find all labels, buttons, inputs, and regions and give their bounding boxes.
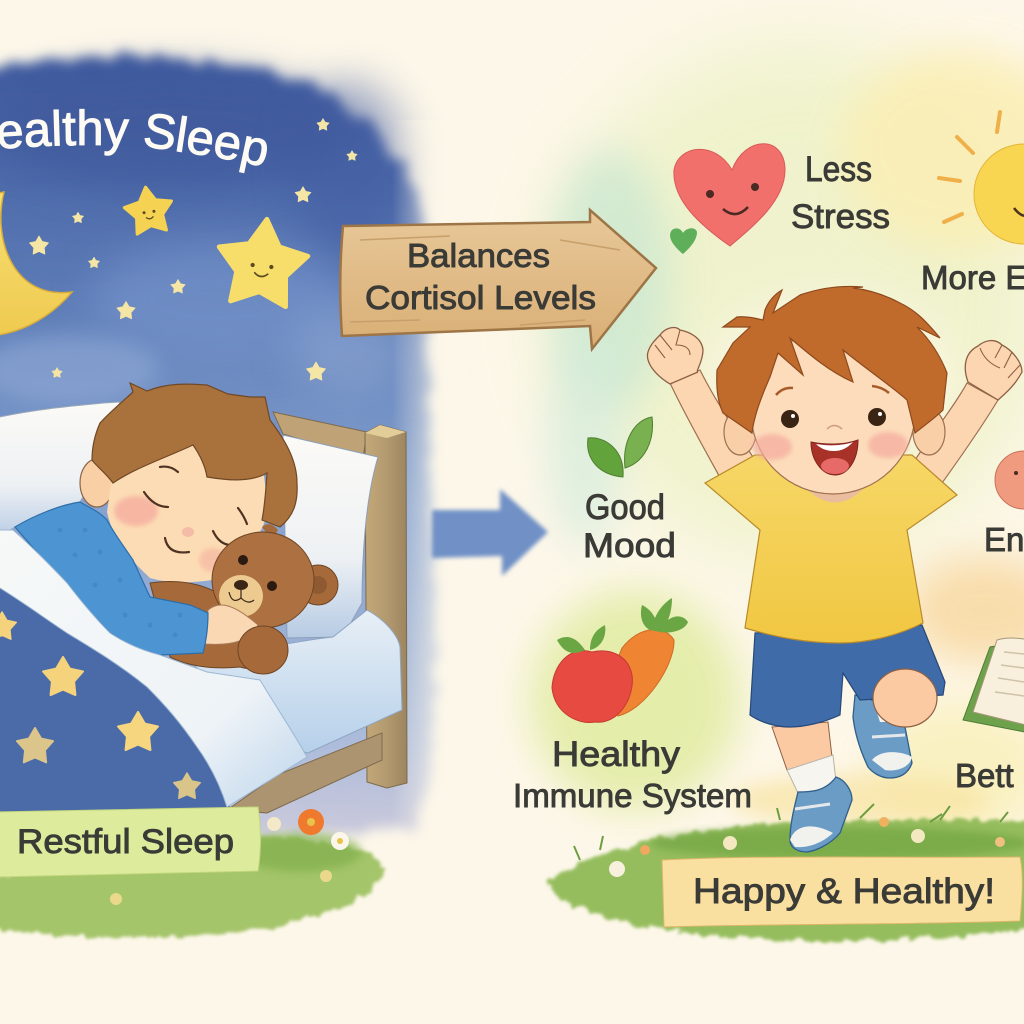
fist right bbox=[965, 341, 1022, 400]
label: healthy immune system: Healthy bbox=[552, 735, 681, 774]
teddy bear bbox=[150, 524, 338, 669]
knee bbox=[873, 669, 937, 727]
icon: sun bbox=[939, 112, 1024, 244]
back shoe bbox=[853, 695, 912, 778]
child sleeping bbox=[80, 383, 297, 582]
banner: happy and healthy: Happy & Healthy! bbox=[693, 872, 995, 911]
label: less stress bbox=[791, 150, 890, 236]
icon: leaves bbox=[588, 417, 653, 477]
child ear bbox=[80, 459, 114, 507]
arrow label: Balances bbox=[407, 237, 550, 274]
head bbox=[751, 330, 915, 494]
hair bbox=[717, 286, 947, 433]
banner: restful sleep bbox=[0, 807, 260, 877]
tiny stars bbox=[30, 118, 357, 380]
icon: large star right bbox=[214, 215, 311, 309]
arrow label: Cortisol Levels bbox=[365, 279, 596, 316]
child eyes and mouth bbox=[144, 467, 247, 552]
child hair bbox=[92, 383, 297, 527]
nose bbox=[827, 426, 842, 429]
pillow right bbox=[283, 435, 378, 638]
right flowers bbox=[609, 817, 1005, 877]
ears bbox=[724, 409, 756, 455]
child blue sleeve bbox=[15, 502, 208, 655]
child hand bbox=[205, 605, 258, 644]
panel: left grass bbox=[0, 832, 384, 938]
neck bbox=[808, 490, 862, 502]
banner: restful sleep: Restful Sleep bbox=[17, 823, 234, 861]
icon: crescent moon bbox=[0, 192, 72, 336]
panel: right grass bbox=[548, 804, 1024, 941]
icon: peach bbox=[995, 451, 1024, 509]
arrow: wooden sign bbox=[340, 210, 656, 349]
label: less stress: Less bbox=[805, 150, 872, 189]
teddy paw bbox=[238, 626, 288, 674]
bed frame bbox=[227, 412, 407, 813]
fist left bbox=[647, 328, 703, 384]
icon: heart bbox=[674, 144, 785, 246]
label: energy: En bbox=[984, 521, 1024, 558]
label: good mood: Good bbox=[585, 488, 665, 527]
label: better: Bett bbox=[955, 757, 1014, 794]
sock bbox=[787, 755, 837, 793]
mouth bbox=[811, 440, 858, 475]
child arms bbox=[670, 370, 760, 483]
icon: apple and carrot bbox=[552, 598, 688, 723]
eyes bbox=[781, 410, 799, 428]
banner: happy and healthy bbox=[662, 857, 1022, 927]
shorts bbox=[750, 625, 945, 727]
mattress bbox=[190, 610, 402, 753]
front shoe bbox=[790, 777, 852, 852]
label: healthy immune system: Immune System bbox=[513, 777, 752, 814]
label: good mood bbox=[583, 488, 676, 565]
blanket bbox=[0, 530, 307, 815]
panel: night sky wash bbox=[0, 57, 452, 850]
label: less stress: Stress bbox=[791, 198, 890, 236]
icon: book bbox=[963, 638, 1024, 733]
pillow left bbox=[0, 402, 120, 540]
left flowers bbox=[110, 809, 349, 905]
cheeks bbox=[752, 434, 792, 460]
shirt bbox=[705, 455, 957, 643]
arrow: blue bbox=[432, 489, 548, 576]
label: good mood: Mood bbox=[583, 527, 676, 565]
sheet fold bbox=[0, 530, 307, 807]
child head bbox=[107, 440, 268, 582]
panel: meadow wash bbox=[530, 40, 1024, 840]
icon: small green heart bbox=[670, 228, 697, 254]
arrow label bbox=[365, 237, 596, 316]
eyebrows bbox=[776, 386, 889, 395]
child cheek bbox=[114, 496, 158, 526]
child jumping bbox=[647, 286, 1022, 852]
front leg bbox=[772, 722, 832, 770]
label: healthy immune system bbox=[513, 735, 752, 814]
icon: small star left bbox=[122, 184, 175, 235]
